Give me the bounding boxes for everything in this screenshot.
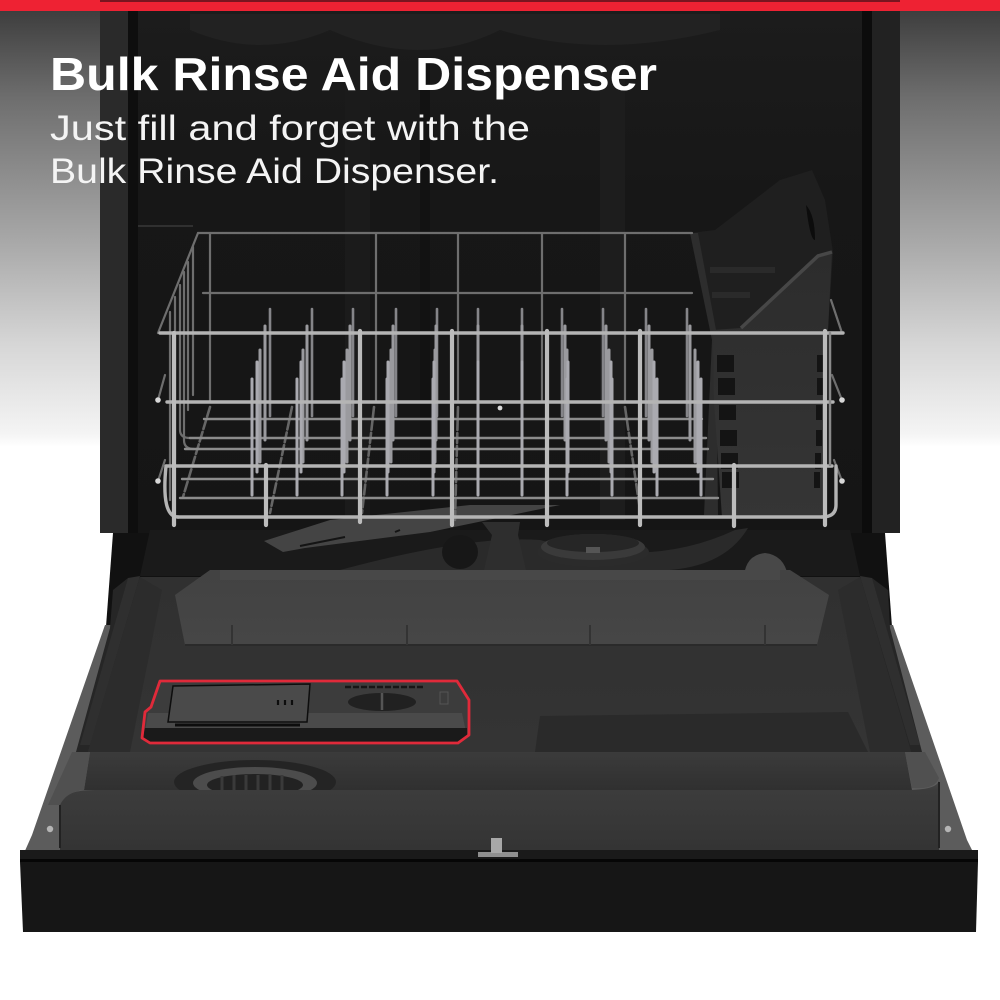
door front panel	[20, 850, 978, 932]
dishwasher tub	[100, 8, 900, 640]
rack: floor wires	[180, 419, 718, 498]
lower dish rack	[155, 233, 845, 526]
detergent dispenser	[142, 681, 469, 743]
description text: Bulk Rinse Aid Dispenser.	[50, 152, 499, 191]
basket: back wall	[690, 170, 833, 330]
rack: front rails	[160, 333, 843, 517]
door: lower right recess	[535, 712, 868, 752]
door: lower lip	[60, 780, 939, 850]
description text: Just fill and forget with the	[50, 109, 530, 148]
door: outer rim	[20, 625, 978, 862]
icon: door latch	[478, 838, 518, 857]
top red bar	[0, 0, 1000, 11]
door: upper raised panel	[175, 570, 829, 645]
dispenser: detergent knob	[348, 693, 416, 711]
door: interior wall	[88, 577, 911, 752]
rack: side pegs	[155, 397, 845, 484]
icon: door filter	[174, 760, 336, 804]
rack: slanted floor wires	[183, 407, 640, 520]
background gradient	[0, 0, 1000, 447]
basket: front wall	[713, 252, 832, 517]
description text	[50, 109, 530, 191]
rack: back tines	[270, 309, 687, 416]
door: lower band	[84, 752, 912, 790]
red highlight outline	[142, 681, 469, 743]
basket: left rib	[690, 233, 718, 515]
basket: slots	[717, 355, 823, 488]
dispenser: rinse aid lid	[168, 684, 310, 722]
door: side channels	[80, 576, 140, 745]
door	[20, 570, 978, 862]
lower spray arm and sump	[264, 505, 788, 576]
title: Bulk Rinse Aid Dispenser	[50, 48, 657, 100]
door: rim screws	[39, 826, 960, 858]
rack: back rails and uprights	[158, 233, 842, 500]
silverware basket	[690, 170, 833, 517]
rack: front posts	[174, 331, 825, 526]
door: rim corners	[48, 752, 90, 805]
